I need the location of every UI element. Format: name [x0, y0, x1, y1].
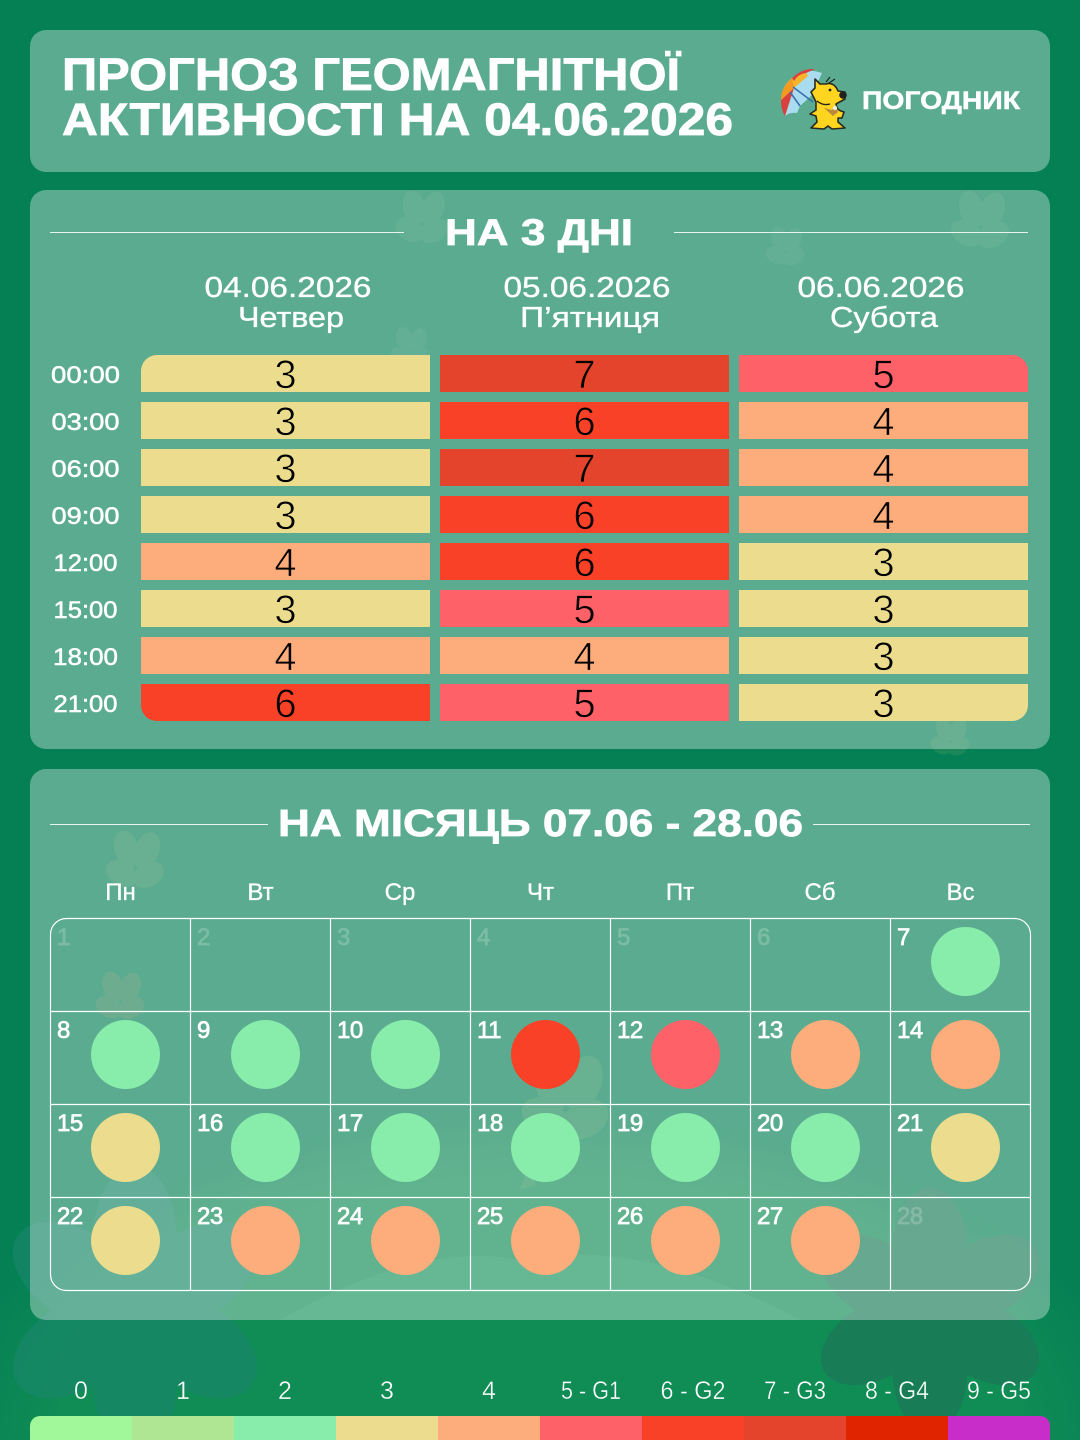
calendar day numbers: 6: [757, 924, 770, 951]
calendar day numbers: 1: [57, 924, 70, 951]
calendar day numbers: 3: [337, 924, 350, 951]
forecast column: 04.06: 4: [274, 541, 297, 585]
calendar day numbers: 16: [197, 1110, 223, 1137]
forecast column: 05.06: 6: [573, 400, 596, 444]
calendar day numbers: 12: [617, 1017, 643, 1044]
calendar day numbers: 13: [757, 1017, 783, 1044]
forecast column: 04.06: 4: [274, 635, 297, 679]
calendar day numbers: 18: [477, 1110, 503, 1137]
legend labels: 0: [74, 1377, 88, 1405]
weekday labels: Сб: [804, 879, 836, 906]
calendar day numbers: 8: [57, 1017, 70, 1044]
calendar day numbers: 26: [617, 1203, 643, 1230]
forecast column: 06.06: 3: [872, 682, 895, 726]
forecast column: 05.06: [440, 353, 729, 726]
forecast column: 06.06: 4: [872, 400, 895, 444]
icon: Pogodnyk dog logo with umbrella: [781, 69, 847, 129]
calendar day numbers: 9: [197, 1017, 210, 1044]
calendar day numbers: 20: [757, 1110, 783, 1137]
calendar day numbers: 17: [337, 1110, 363, 1137]
forecast column: 04.06: 3: [274, 447, 297, 491]
forecast column: 05.06: 7: [573, 353, 596, 397]
forecast column: 06.06: 5: [872, 353, 895, 397]
weekday labels: Ср: [385, 879, 415, 906]
calendar day numbers: 5: [617, 924, 630, 951]
title: АКТИВНОСТІ НА 04.06.2026: [62, 94, 733, 145]
forecast column: 04.06: 6: [274, 682, 297, 726]
legend labels: 9 - G5: [967, 1377, 1031, 1405]
forecast column: 05.06: 5: [573, 588, 596, 632]
forecast column: 05.06: 6: [573, 494, 596, 538]
calendar day numbers: 25: [477, 1203, 503, 1230]
panel: 3-day forecast: [30, 190, 1050, 749]
weekday labels: Вт: [247, 879, 274, 906]
legend labels: 6 - G2: [660, 1377, 726, 1405]
calendar day numbers: 11: [477, 1017, 501, 1044]
time labels: 15:00: [54, 597, 118, 624]
legend labels: 8 - G4: [865, 1377, 929, 1405]
legend labels: [74, 1377, 1031, 1405]
time labels: [51, 362, 120, 718]
legend labels: 1: [176, 1377, 190, 1405]
time labels: 00:00: [51, 362, 120, 389]
calendar day numbers: 24: [337, 1203, 363, 1230]
forecast column: 04.06: [141, 353, 430, 726]
forecast column: 04.06: 3: [274, 400, 297, 444]
heading: 3 days: НА 3 ДНІ: [445, 212, 633, 253]
column headers: П’ятниця: [520, 302, 660, 334]
legend labels: 3: [380, 1377, 394, 1405]
calendar day numbers: 27: [757, 1203, 783, 1230]
calendar day numbers: 28: [897, 1203, 923, 1230]
legend labels: 7 - G3: [764, 1377, 826, 1405]
time labels: 12:00: [54, 550, 118, 577]
panel: title header: [30, 30, 1050, 172]
time labels: 09:00: [52, 503, 120, 530]
forecast column: 04.06: 3: [274, 494, 297, 538]
logo wordmark: ПОГОДНИК: [862, 87, 1021, 115]
forecast column: 06.06: [739, 353, 1028, 726]
column headers: 06.06.2026: [798, 272, 964, 304]
legend labels: 5 - G1: [561, 1377, 621, 1405]
forecast column: 05.06: 5: [573, 682, 596, 726]
weekday labels: Пт: [666, 879, 694, 906]
legend colour bar: [30, 1416, 1050, 1440]
forecast column: 05.06: 4: [573, 635, 596, 679]
calendar day numbers: 21: [897, 1110, 923, 1137]
weekday labels: [105, 879, 975, 906]
calendar grid: [50, 918, 1030, 1290]
weekday labels: Вс: [946, 879, 975, 906]
column headers: 05.06.2026: [504, 272, 670, 304]
calendar day numbers: [57, 924, 923, 1230]
legend labels: 2: [278, 1377, 292, 1405]
weekday labels: Пн: [105, 879, 136, 906]
calendar day numbers: 15: [57, 1110, 83, 1137]
calendar day numbers: 22: [57, 1203, 83, 1230]
time labels: 21:00: [54, 691, 118, 718]
panel: monthly forecast: [30, 769, 1050, 1320]
calendar day circles: [91, 927, 1000, 1275]
forecast column: 04.06: 3: [274, 353, 297, 397]
title: [62, 49, 733, 145]
time labels: 03:00: [52, 409, 120, 436]
forecast column: 06.06: 3: [872, 635, 895, 679]
forecast column: 06.06: 3: [872, 541, 895, 585]
forecast column: 06.06: 4: [872, 447, 895, 491]
heading: month: НА МІСЯЦЬ 07.06 - 28.06: [278, 803, 803, 845]
forecast column: 06.06: 3: [872, 588, 895, 632]
forecast column: 05.06: 7: [573, 447, 596, 491]
title: ПРОГНОЗ ГЕОМАГНІТНОЇ: [62, 49, 682, 100]
weekday labels: Чт: [527, 879, 554, 906]
time labels: 06:00: [52, 456, 120, 483]
column headers: Четвер: [238, 302, 344, 334]
calendar day numbers: 10: [337, 1017, 363, 1044]
time labels: 18:00: [53, 644, 118, 671]
column headers: [204, 272, 964, 334]
column headers: 04.06.2026: [204, 272, 372, 304]
calendar day numbers: 23: [197, 1203, 223, 1230]
forecast column: 05.06: 6: [573, 541, 596, 585]
column headers: Субота: [830, 302, 939, 334]
forecast column: 04.06: 3: [274, 588, 297, 632]
calendar day numbers: 7: [897, 924, 910, 951]
legend scale: [30, 1377, 1050, 1440]
calendar day numbers: 4: [477, 924, 490, 951]
forecast column: 06.06: 4: [872, 494, 895, 538]
calendar day numbers: 2: [197, 924, 210, 951]
legend labels: 4: [482, 1377, 496, 1405]
calendar day numbers: 19: [617, 1110, 643, 1137]
calendar day numbers: 14: [897, 1017, 923, 1044]
